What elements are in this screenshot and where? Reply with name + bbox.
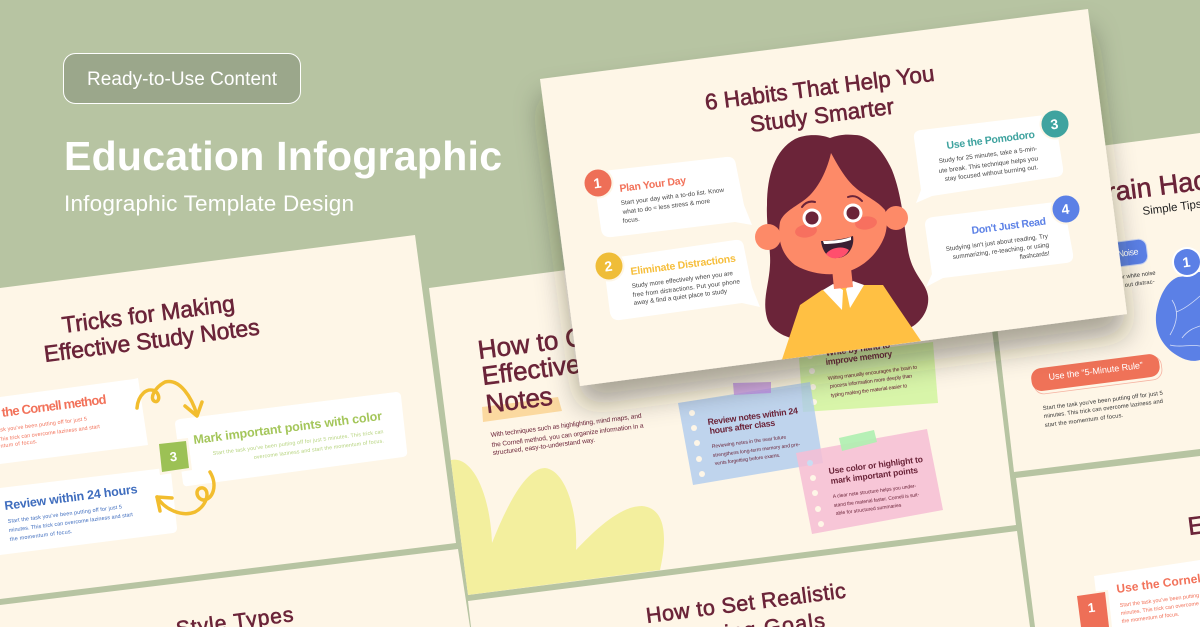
main heading: Education Infographic — [64, 133, 502, 179]
note: pink: mark important points — [830, 465, 919, 486]
badge: Ready-to-Use Content — [64, 54, 300, 104]
text: noise tip: out distrac- — [1124, 279, 1155, 289]
callout 3: Use the Pomodoro: ute break. This technique helps you — [938, 155, 1039, 175]
badge: 1 — [1172, 247, 1200, 277]
panel: Style Types slide — [0, 549, 470, 627]
note: pink: stand the material faster. Cornell is suit- — [833, 492, 920, 509]
card: Review within 24 hours: the momentum of focus. — [9, 529, 73, 543]
badge: 1: 1 — [1087, 600, 1096, 615]
tape: purple — [733, 382, 771, 395]
highlight — [482, 397, 562, 422]
note: blue — [678, 382, 823, 485]
pill: 5-minute rule — [1030, 353, 1163, 395]
title: how to create: How to Create — [476, 314, 645, 365]
card text: the momentum of focus. — [1121, 612, 1180, 625]
callout 2: Eliminate Distractions — [594, 240, 760, 320]
pill: noise — [1062, 238, 1149, 274]
decorative blob — [448, 460, 664, 595]
callout 3: Use the Pomodoro: Study for 25 minutes, take a 5-min- — [938, 145, 1037, 165]
note: green — [799, 340, 938, 412]
face — [779, 153, 887, 274]
note: pink: able for structured summaries — [835, 503, 902, 517]
hair — [765, 135, 928, 340]
tape: green — [839, 430, 877, 451]
title: tricks: Tricks for Making — [60, 290, 236, 338]
card: Review within 24 hours: minutes. This trick can overcome laziness and start — [8, 512, 134, 534]
mouth — [821, 236, 853, 258]
callout 1: Plan Your Day: 1 — [592, 175, 602, 191]
sweater — [782, 285, 921, 360]
ears — [755, 206, 908, 250]
neck — [832, 268, 853, 289]
callout 3: Use the Pomodoro: stay focused without burning out. — [944, 164, 1039, 183]
arrow: curl top — [137, 381, 202, 416]
title: 6 habits: Study Smarter — [748, 94, 896, 137]
illustration: girl — [755, 135, 928, 360]
cheeks — [794, 215, 878, 239]
card: Cornell method — [0, 378, 148, 464]
callout 1: Plan Your Day: Start your day with a to-do list. Know — [620, 187, 725, 207]
note: pink: Use color or highlight to — [828, 454, 923, 476]
callout 4: Don't Just Read — [925, 194, 1082, 287]
note: pink: A clear note structure helps you under- — [832, 483, 917, 500]
text: noise tip — [1119, 270, 1156, 289]
badge: 1: 1 — [1181, 254, 1191, 270]
note: blue: vents forgetting before exams. — [714, 453, 781, 467]
note: blue: strengthens long-term memory and pre- — [712, 442, 801, 459]
badge: 1 — [1074, 590, 1112, 627]
callout 1: Plan Your Day: what to do = less stress & more — [621, 198, 711, 216]
title: 6 habits: 6 Habits That Help You — [703, 61, 936, 115]
card: Mark important points: Start the task you've been putting off for just 5 minutes. This trick can — [212, 429, 384, 457]
badge: step 3: 3 — [169, 449, 178, 464]
panel: How to Set Realistic Learning Goals: How to Set Realistic — [645, 579, 847, 627]
callout 4: Don't Just Read: Studying isn't just about reading. Try — [945, 233, 1049, 253]
text: noise tip: or white noise — [1119, 270, 1156, 281]
panel: lower right slide — [1016, 456, 1200, 627]
description — [490, 413, 644, 457]
note: blue: Reviewing notes in the near future — [711, 434, 787, 450]
callout 4: Don't Just Read: summarizing, re-teaching, or using — [952, 242, 1050, 261]
note: pink — [796, 429, 943, 534]
arrow: curl bottom — [157, 472, 214, 514]
note: blue: hours after class — [709, 418, 776, 436]
callout 1: Plan Your Day — [582, 157, 752, 237]
card: Review within 24 hours: Start the task you've been putting off for just 5 — [7, 504, 122, 525]
callout 4: Don't Just Read: 4 — [1060, 201, 1070, 217]
description: the Cornell method, you can organize information in a — [491, 423, 644, 449]
text: 5-minute rule — [1042, 391, 1163, 429]
callout 2: Eliminate Distractions: Study more effectively when you are — [631, 270, 734, 290]
text: 5-minute rule: minutes. This trick can overcome laziness and — [1043, 399, 1163, 420]
callout 3: Use the Pomodoro — [914, 108, 1070, 203]
text: 5-minute rule: Start the task you've been putting off for just 5 — [1042, 391, 1163, 412]
panel: Brain Hacks — [978, 133, 1200, 472]
callout 2: Eliminate Distractions: free from distractions. Put your phone — [632, 278, 741, 299]
subheading: Infographic Template Design — [64, 191, 354, 216]
callout 3: Use the Pomodoro: Use the Pomodoro — [946, 129, 1036, 152]
eyebrows — [802, 196, 862, 207]
panel: How to Set Realistic Learning Goals — [468, 531, 1030, 627]
card text — [1116, 571, 1200, 625]
illustration: brain — [1156, 272, 1200, 361]
note: green: Writing manually encourages the brain to — [827, 365, 918, 382]
text: 5-minute rule: start the momentum of focus. — [1044, 413, 1124, 429]
title: how to create: Notes — [484, 381, 554, 419]
panel: How to Create Effective Study Notes — [429, 270, 1016, 595]
title: tricks — [42, 290, 261, 367]
pill: 5-minute rule: Use the “5-Minute Rule” — [1048, 360, 1143, 382]
card: Review within 24 hours — [0, 468, 177, 555]
description: With techniques such as highlighting, mind maps, and — [490, 413, 642, 439]
callout 2: Eliminate Distractions: away & find a quiet place to study — [633, 288, 728, 307]
callout 1: Plan Your Day: Plan Your Day — [619, 175, 687, 195]
callout 2: Eliminate Distractions: 2 — [603, 258, 613, 274]
note: green: improve memory — [825, 349, 893, 367]
description: structured, easy-to-understand way. — [492, 437, 596, 457]
panel: Tricks for Making Effective Study Notes — [0, 235, 456, 599]
card: Review within 24 hours: Review within 24 hours — [4, 482, 138, 513]
callout 4: Don't Just Read: Don't Just Read — [971, 216, 1047, 237]
callout 1: Plan Your Day: focus. — [622, 216, 640, 225]
pill: noise: Noise — [1117, 246, 1139, 259]
collar — [823, 281, 864, 310]
card: Mark important points — [175, 392, 407, 486]
callout 2: Eliminate Distractions: Eliminate Distractions — [630, 253, 737, 278]
note: green: typing making the material easier to — [830, 383, 908, 399]
callout 4: Don't Just Read: flashcards! — [1019, 250, 1050, 261]
badge: step 3 — [156, 438, 192, 475]
panel: 6 Habits That Help You Study Smarter — [540, 9, 1127, 386]
title: how to create — [476, 314, 655, 419]
card: Mark important points: Mark important points with color — [193, 409, 383, 447]
title: how to create: Effective Study — [480, 339, 655, 391]
note: blue: Review notes within 24 — [707, 405, 799, 427]
eyes — [802, 204, 862, 228]
title: tricks: Effective Study Notes — [42, 314, 261, 367]
badge: Ready-to-Use Content: Ready-to-Use Content — [87, 69, 278, 90]
note: green: process information more deeply than — [829, 373, 913, 390]
card: Mark important points: overcome laziness and start the momentum of focus. — [253, 438, 384, 461]
note: green: Write by hand to — [825, 340, 891, 358]
callout 3: Use the Pomodoro: 3 — [1049, 116, 1059, 132]
card: use the Cornell — [1094, 560, 1200, 627]
